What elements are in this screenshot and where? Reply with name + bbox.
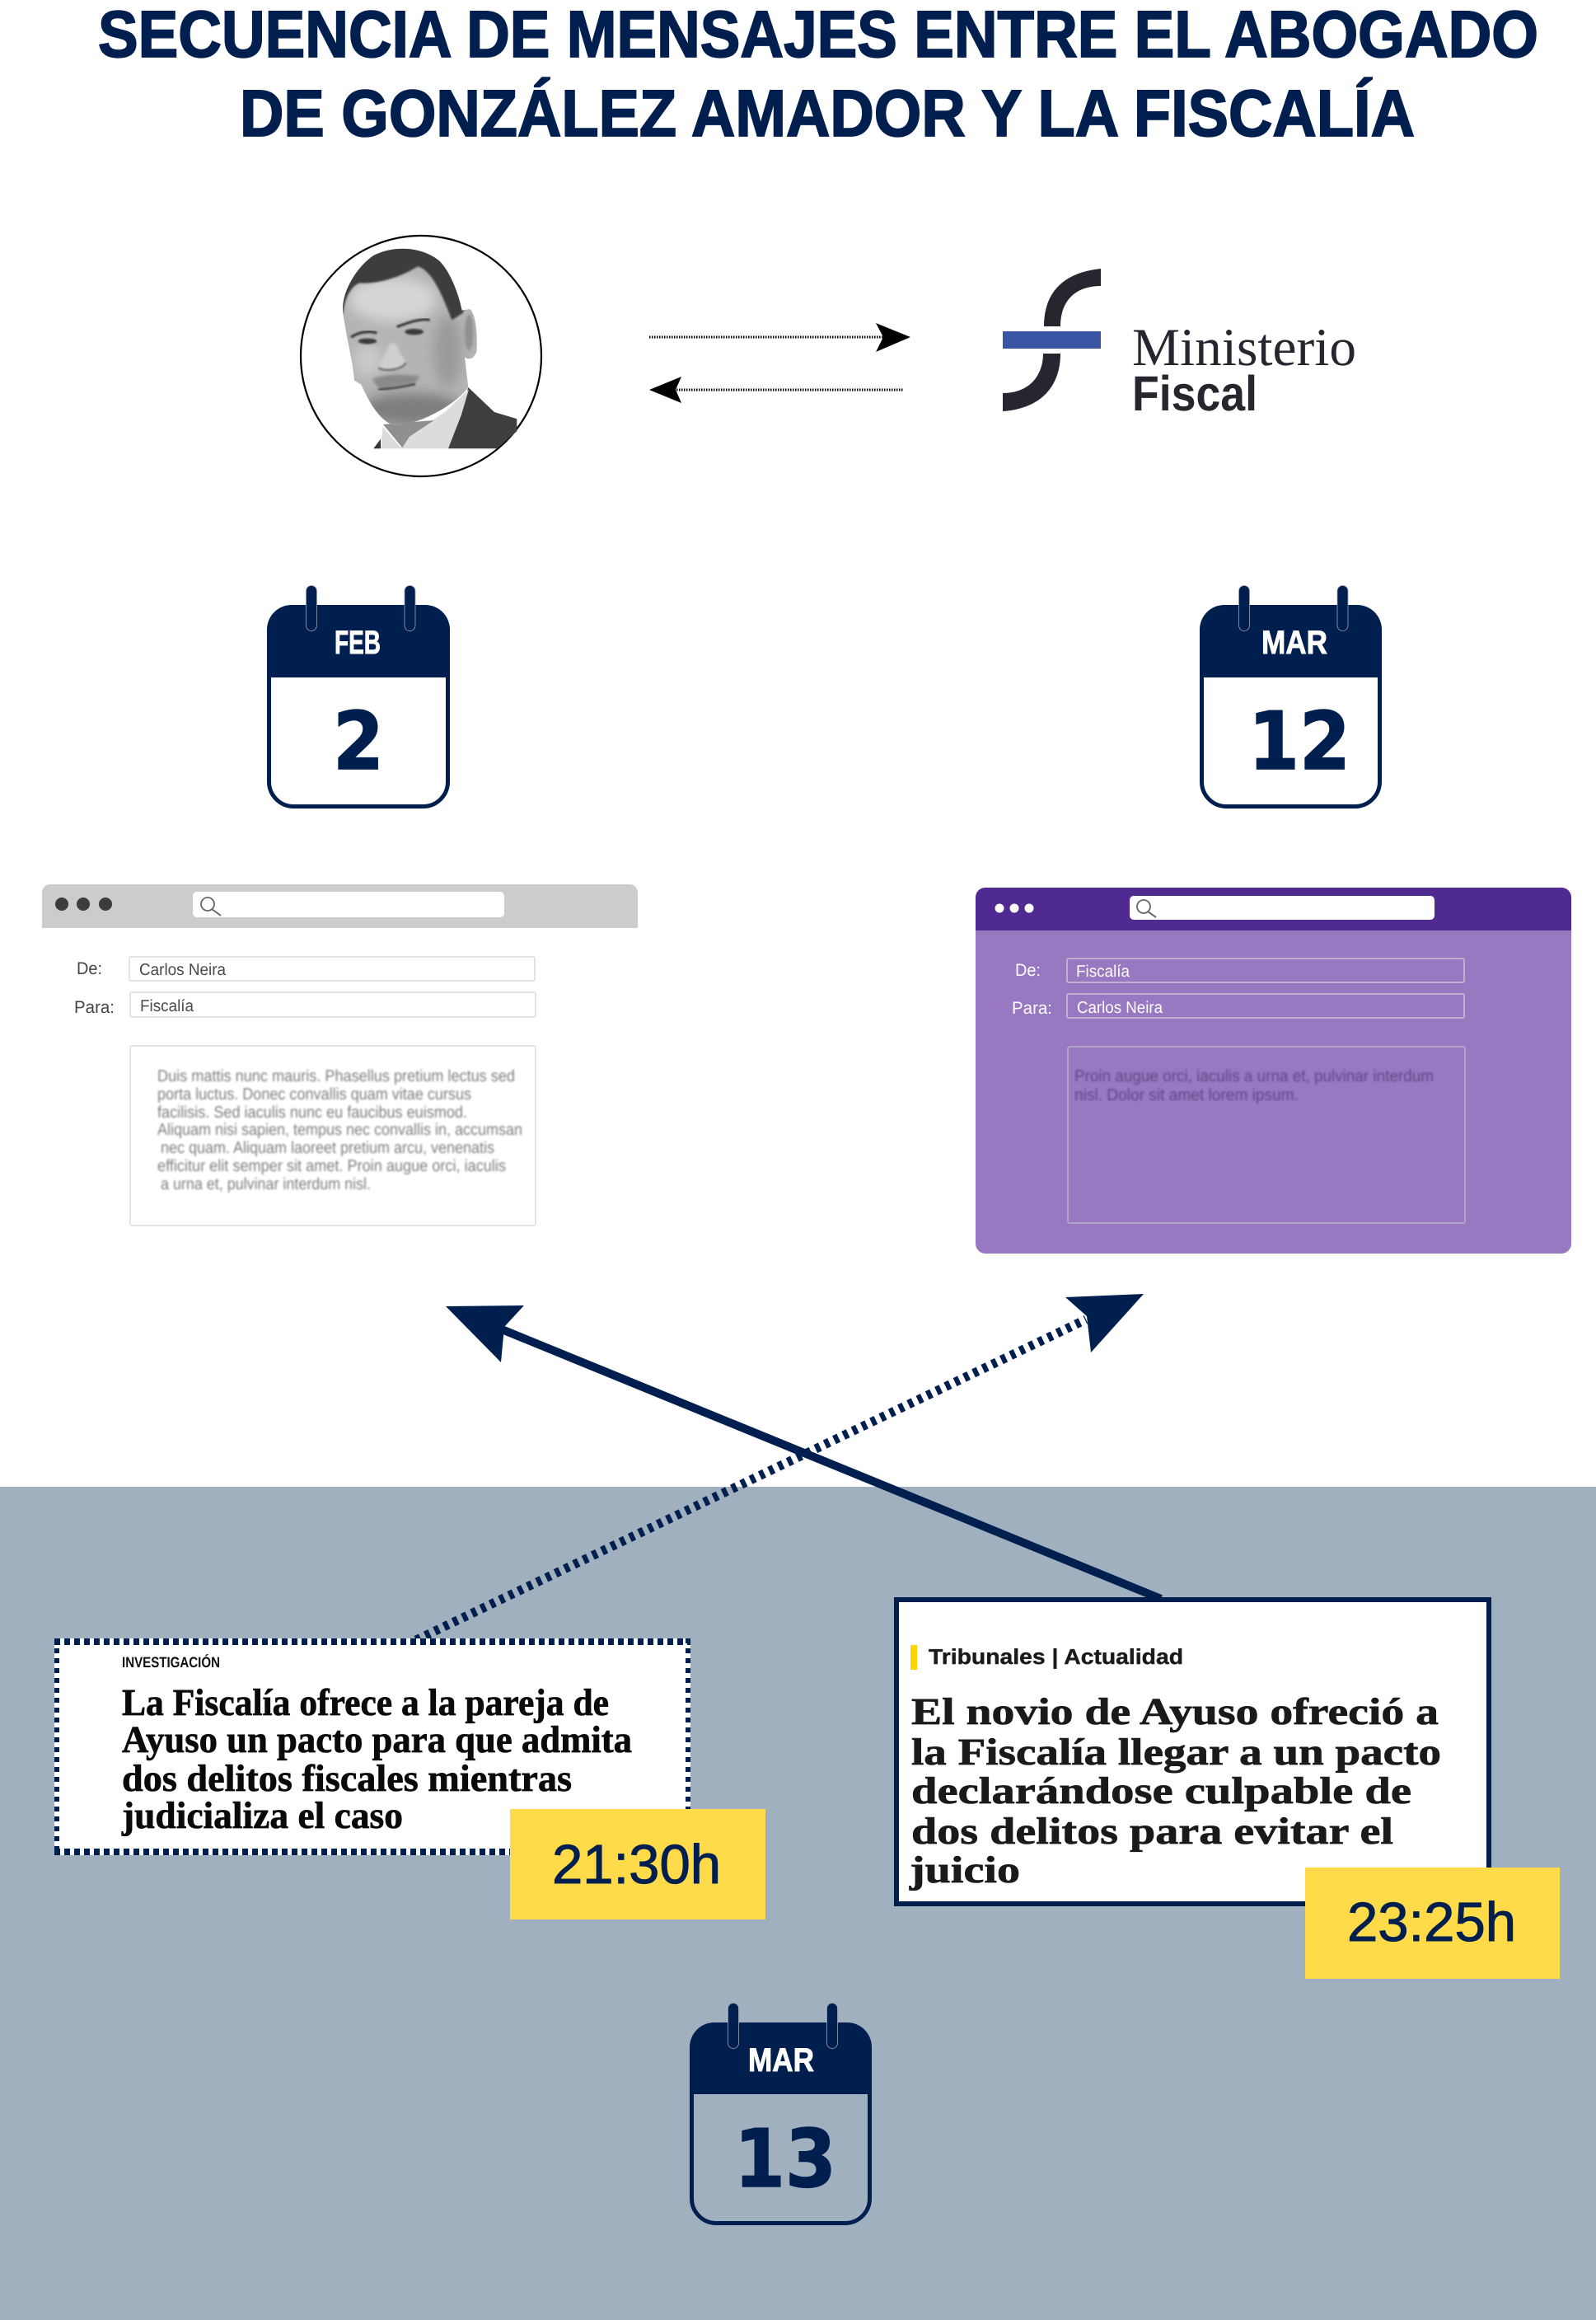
bottom background band	[0, 1487, 1596, 2320]
calendar: MAR 12: 12	[1248, 695, 1350, 788]
time badge: 23:25h	[1305, 1868, 1560, 1979]
email window: lawyer to prosecutor: Aliquam nisi sapien, tempus nec convallis in, accumsan	[157, 1121, 522, 1139]
email window: prosecutor to lawyer: De:	[1015, 961, 1041, 980]
email window: prosecutor to lawyer: Proin augue orci, iaculis a urna et, pulvinar interdum	[1074, 1067, 1434, 1085]
panel: headline 21:30h	[54, 1638, 690, 1855]
calendar: MAR 13	[690, 2003, 872, 2224]
head	[343, 249, 477, 425]
email window: prosecutor to lawyer: Para:	[1012, 999, 1052, 1018]
calendar: FEB 2	[267, 585, 450, 806]
logo: Ministerio Fiscal	[1003, 269, 1356, 421]
calendar: MAR 13: MAR	[748, 2042, 814, 2079]
email window: prosecutor to lawyer: Fiscalía	[1076, 963, 1130, 981]
logo: Ministerio Fiscal: Ministerio	[1132, 318, 1356, 377]
email window: lawyer to prosecutor: porta luctus. Donec convallis quam vitae cursus	[157, 1085, 471, 1104]
panel: headline 23:25h: El novio de Ayuso ofreció a	[911, 1690, 1439, 1732]
email window: lawyer to prosecutor: Fiscalía	[140, 997, 194, 1015]
facial features	[351, 332, 377, 337]
email window: lawyer to prosecutor: Carlos Neira	[139, 961, 227, 979]
panel: headline 23:25h: dos delitos para evitar el	[911, 1810, 1393, 1852]
email window: lawyer to prosecutor: Duis mattis nunc mauris. Phasellus pretium lectus sed	[157, 1067, 515, 1085]
panel: headline 21:30h: dos delitos fiscales mientras	[122, 1757, 572, 1799]
email window: prosecutor to lawyer: Carlos Neira	[1077, 999, 1163, 1017]
suit	[448, 387, 517, 448]
solid arrow: headline 23:25h to lawyer email	[446, 1305, 1161, 1599]
arrow: prosecutor to lawyer	[649, 377, 903, 403]
panel: headline 23:25h: declarándose culpable de	[911, 1769, 1411, 1811]
shirt	[381, 390, 469, 448]
calendar: MAR 12	[1200, 585, 1382, 806]
calendar: MAR 13: 13	[734, 2112, 836, 2205]
calendar: FEB 2: FEB	[335, 625, 381, 661]
arrow: lawyer to prosecutor	[649, 323, 910, 352]
logo: Ministerio Fiscal: Fiscal	[1132, 366, 1257, 421]
email window: lawyer to prosecutor: nec quam. Aliquam laoreet pretium arcu, venenatis	[161, 1139, 494, 1157]
email window: prosecutor to lawyer	[976, 888, 1571, 1254]
portrait: lawyer photo in circle	[301, 236, 541, 476]
panel: headline 23:25h	[896, 1600, 1489, 1904]
panel: headline 21:30h: judicializa el caso	[121, 1794, 403, 1836]
panel: headline 23:25h: juicio	[909, 1849, 1020, 1891]
panel: headline 23:25h: la Fiscalía llegar a un pacto	[911, 1731, 1441, 1774]
email window: prosecutor to lawyer: nisl. Dolor sit amet lorem ipsum.	[1074, 1086, 1299, 1104]
email window: lawyer to prosecutor	[42, 884, 638, 1226]
panel: headline 21:30h: La Fiscalía ofrece a la pareja de	[122, 1681, 609, 1723]
title	[98, 0, 1538, 150]
email window: lawyer to prosecutor: De:	[77, 959, 102, 978]
email window: lawyer to prosecutor: a urna et, pulvinar interdum nisl.	[161, 1175, 371, 1193]
panel: headline 23:25h: Tribunales | Actualidad	[929, 1644, 1183, 1669]
email window: lawyer to prosecutor: efficitur elit semper sit amet. Proin augue orci, iaculis	[157, 1157, 506, 1175]
dotted arrow: headline 21:30h to prosecutor email	[416, 1294, 1144, 1640]
time badge: 23:25h: 23:25h	[1347, 1891, 1516, 1953]
title: DE GONZÁLEZ AMADOR Y LA FISCALÍA	[240, 77, 1415, 150]
email window: lawyer to prosecutor: facilisis. Sed iaculis nunc eu faucibus euismod.	[157, 1104, 467, 1122]
calendar: FEB 2: 2	[333, 695, 384, 788]
time badge: 21:30h: 21:30h	[552, 1834, 721, 1896]
time badge: 21:30h	[510, 1809, 765, 1919]
email window: lawyer to prosecutor: Para:	[74, 998, 115, 1017]
panel: headline 21:30h: INVESTIGACIÓN	[122, 1654, 220, 1671]
calendar: MAR 12: MAR	[1261, 625, 1327, 661]
panel: headline 21:30h: Ayuso un pacto para que admita	[122, 1718, 632, 1760]
